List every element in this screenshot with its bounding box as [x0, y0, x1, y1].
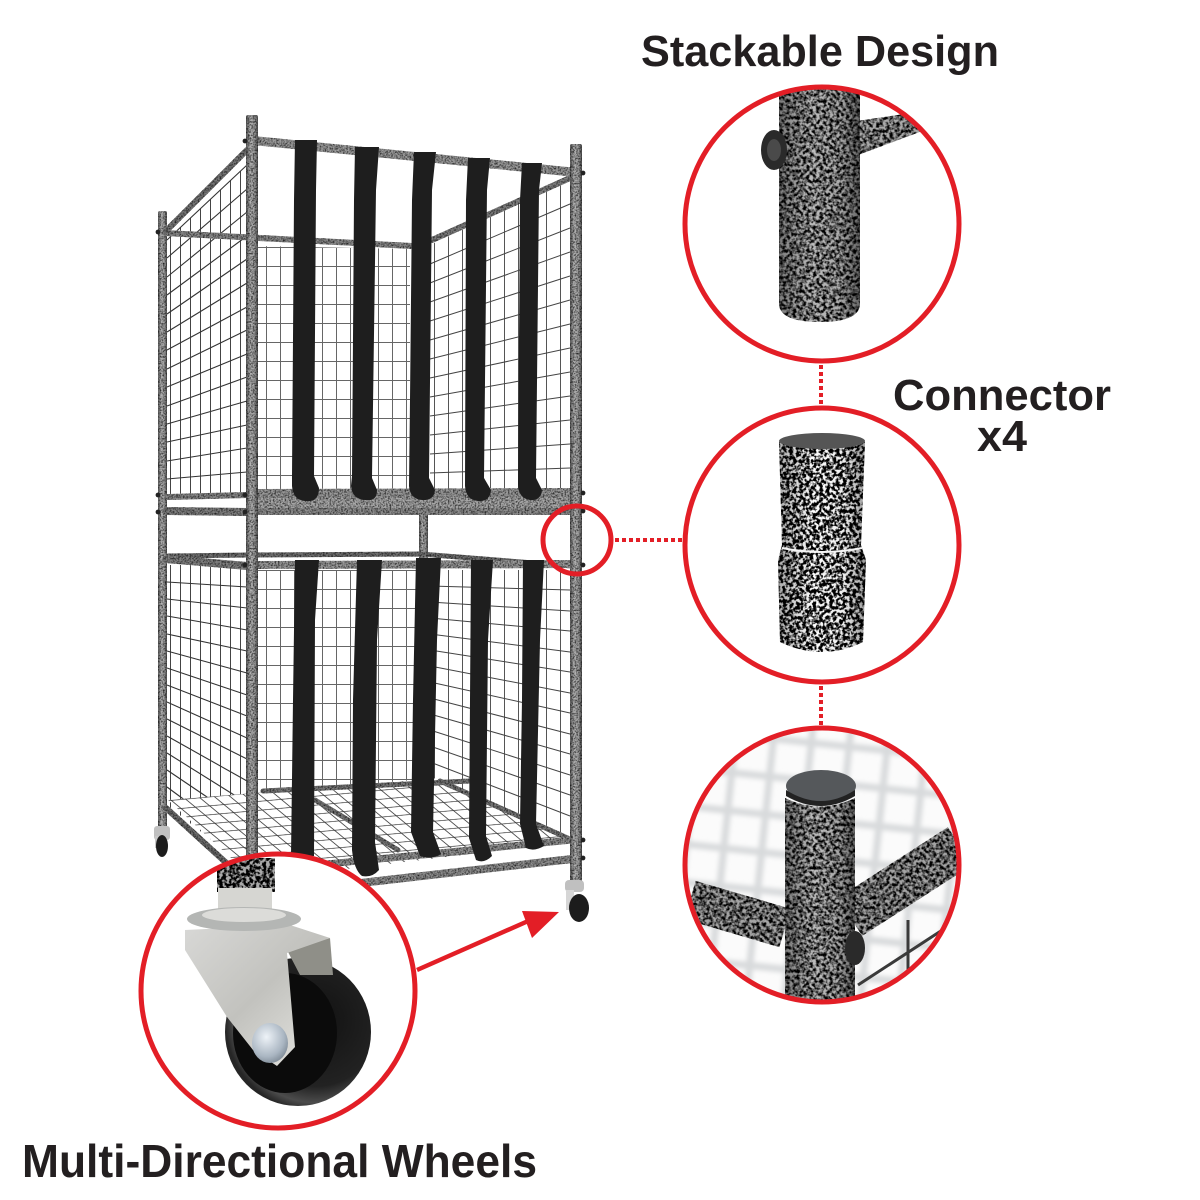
heading: stackable design: Stackable Design: [641, 27, 999, 76]
small caster left: [154, 826, 170, 857]
upper hanging straps: [292, 140, 542, 501]
front posts: [246, 115, 582, 882]
heading: connector x4: [893, 371, 1111, 461]
upper basket mesh: [167, 165, 570, 498]
detail circle: connector sleeve: [685, 408, 959, 682]
detail circle: post top with cap: [680, 725, 965, 1010]
dotted line to connector: [615, 538, 682, 542]
small caster right: [565, 880, 589, 922]
detail circle: swivel wheel: [141, 854, 415, 1128]
frame rails: [165, 141, 572, 895]
post stub: [217, 858, 275, 892]
wheel: [225, 958, 371, 1106]
arrow to caster: [417, 911, 559, 970]
connector highlight circle: [543, 506, 611, 574]
bracket: [185, 888, 333, 1066]
heading: connector x4: x4: [977, 412, 1028, 461]
detail circle: stackable post bottom: [685, 80, 959, 361]
heading: multi-directional wheels: Multi-Directional Wheels: [22, 1135, 537, 1187]
dotted line lower: [819, 686, 823, 726]
dotted line upper: [819, 365, 823, 406]
lower hanging straps: [291, 558, 544, 876]
heading: connector x4: Connector: [893, 371, 1111, 420]
lower basket mesh and floor: [167, 565, 572, 880]
frame bolts: [156, 139, 585, 860]
stackable cart photo: [154, 115, 589, 922]
back posts and connector: [158, 211, 428, 833]
